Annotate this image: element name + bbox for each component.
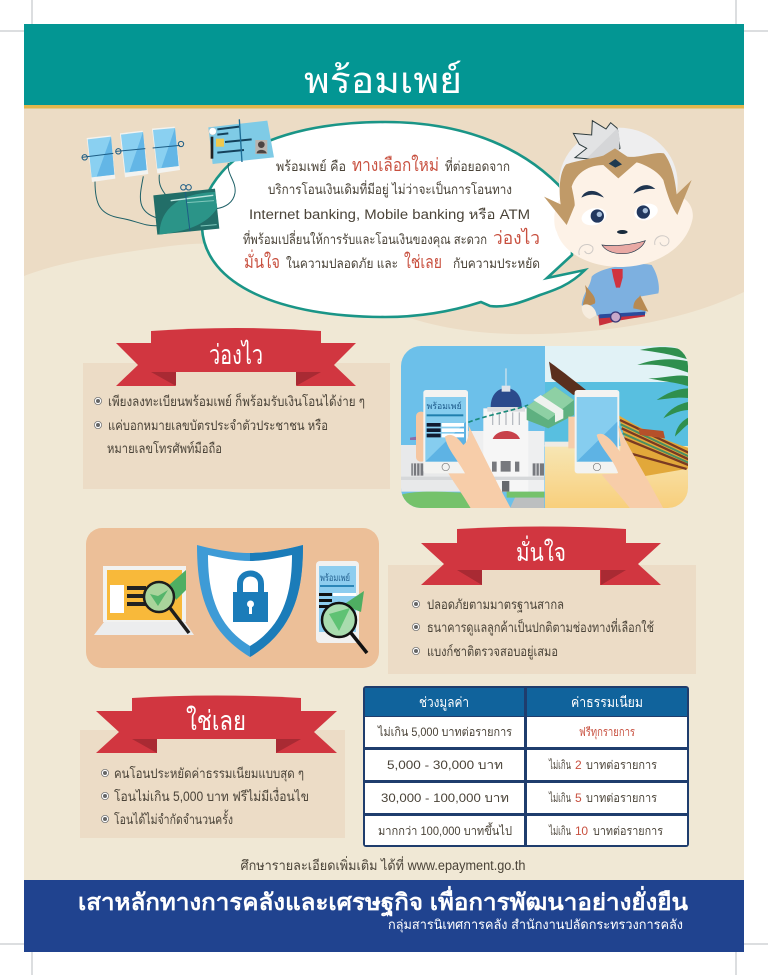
illustration: phone transfer between palace and beach: พร้อมเพย์	[427, 401, 462, 411]
body	[582, 264, 659, 318]
palace	[400, 368, 544, 492]
bullet list: โอนได้ไม่จำกัดจำนวนครั้ง	[114, 809, 233, 827]
phone 1	[82, 135, 115, 182]
ID card	[208, 119, 274, 164]
table rows: ไม่เกิน	[548, 791, 571, 805]
bubble text: มั่นใจ	[244, 249, 280, 272]
ribbon: มั่นใจ	[421, 526, 661, 585]
title: พร้อมเพย์	[304, 60, 462, 101]
table rows: 5	[575, 791, 582, 805]
ribbon: มั่นใจ: มั่นใจ	[516, 535, 566, 567]
table rows: บาทต่อรายการ	[593, 824, 663, 838]
right hand	[597, 425, 663, 508]
phone 3	[152, 127, 184, 173]
icon: laptop with magnifier	[94, 566, 194, 635]
fee table	[363, 686, 689, 847]
left hand	[445, 425, 512, 510]
bubble text: ทางเลือกใหม่	[352, 154, 439, 175]
ribbon: ว่องไว: ว่องไว	[209, 340, 263, 370]
panel: security illustration	[86, 528, 379, 668]
hair band	[544, 148, 692, 225]
bullet list	[101, 765, 309, 827]
mouth	[602, 241, 645, 254]
table rows: 30,000 - 100,000 บาท	[381, 791, 509, 805]
head back	[559, 128, 678, 239]
right phone	[575, 390, 619, 473]
bubble text: บริการโอนเงินเดิมที่มีอยู่ ไม่ว่าจะเป็นการโอนทาง	[268, 180, 512, 198]
bullet list: โอนไม่เกิน 5,000 บาท ฟรีไม่มีเงื่อนไข	[114, 787, 309, 804]
table header	[365, 688, 687, 716]
bubble text: ที่ต่อยอดจาก	[445, 157, 510, 174]
bubble text: กับความประหยัด	[453, 256, 540, 271]
bullet list: แค่บอกหมายเลขบัตรประจำตัวประชาชน หรือ	[108, 418, 328, 433]
table header: ค่าธรรมเนียม	[571, 694, 643, 710]
palm	[637, 347, 690, 437]
bullet list: ปลอดภัยตามมาตรฐานสากล	[427, 597, 564, 613]
table rows: 2	[575, 758, 582, 772]
icon: phone with magnifier: พร้อมเพย์	[320, 572, 350, 584]
icon: phone with magnifier	[316, 561, 367, 653]
footer slogan: เสาหลักทางการคลังและเศรษฐกิจ เพื่อการพัฒนาอย่างยั่งยืน	[78, 885, 688, 917]
mascot monkey	[544, 121, 693, 326]
table rows: 5,000 - 30,000 บาท	[387, 758, 503, 772]
left hand back fingers	[416, 412, 424, 462]
eyes	[580, 205, 608, 228]
footer band	[24, 880, 744, 952]
bubble text: Internet banking, Mobile banking หรือ ATM	[249, 207, 530, 222]
bubble text: ในความปลอดภัย และ	[286, 255, 398, 271]
bubble text: พร้อมเพย์ คือ	[276, 158, 346, 174]
speech bubble	[202, 122, 585, 317]
table rows: ฟรีทุกรายการ	[579, 725, 635, 740]
table header: ช่วงมูลค่า	[419, 694, 469, 711]
footer organisation: กลุ่มสารนิเทศการคลัง สำนักงานปลัดกระทรวงการคลัง	[388, 917, 683, 933]
icon: phones, ID card and bank book linked together	[82, 119, 274, 235]
page background panel	[24, 105, 744, 880]
bubble text: ว่องไว	[493, 227, 540, 248]
bullet list: แบงก์ชาติตรวจสอบอยู่เสมอ	[427, 643, 558, 660]
table rows: บาทต่อรายการ	[586, 758, 657, 772]
bubble text	[243, 154, 540, 272]
bullet list: ธนาคารดูแลลูกค้าเป็นปกติตามช่องทางที่เลือกใช้	[427, 618, 654, 636]
panel: ว่องไว	[83, 328, 390, 489]
brows	[581, 185, 655, 198]
table rows: ไม่เกิน	[548, 758, 571, 772]
boat hull	[618, 415, 690, 477]
website note: ศึกษารายละเอียดเพิ่มเติม ได้ที่ www.epayment.go.th	[240, 856, 526, 873]
ribbon: ว่องไว	[116, 328, 356, 386]
table rows: 10	[575, 824, 588, 838]
table rows: มากกว่า 100,000 บาทขึ้นไป	[378, 822, 512, 838]
panel: ใช่เลย	[80, 696, 345, 838]
panel: มั่นใจ	[388, 526, 696, 674]
table rows	[365, 717, 687, 845]
dashed transfer line	[468, 405, 528, 422]
lawn	[402, 492, 470, 508]
left phone	[423, 390, 468, 473]
illustration: phone transfer between palace and beach	[400, 346, 690, 510]
ribbon: ใช่เลย	[96, 696, 337, 753]
bubble text: ใช่เลย	[404, 251, 442, 272]
table rows: ไม่เกิน	[548, 824, 571, 838]
forehead gem	[609, 159, 622, 168]
table rows: บาทต่อรายการ	[586, 791, 657, 805]
boat prow	[549, 362, 586, 395]
bullet list: หมายเลขโทรศัพท์มือถือ	[107, 440, 222, 456]
title band	[24, 24, 744, 108]
face	[554, 161, 693, 267]
bullet list	[94, 392, 365, 456]
bullet list: คนโอนประหยัดค่าธรรมเนียมแบบสุด ๆ	[114, 765, 304, 782]
icon: shield with padlock	[197, 545, 303, 657]
phone 2	[116, 131, 148, 177]
money stack	[527, 387, 574, 428]
table rows: ไม่เกิน 5,000 บาทต่อรายการ	[377, 725, 512, 739]
crown	[573, 121, 620, 160]
bullet list	[412, 597, 654, 660]
bullet list: เพียงลงทะเบียนพร้อมเพย์ ก็พร้อมรับเงินโอนได้ง่าย ๆ	[108, 392, 365, 409]
bank book	[153, 185, 219, 235]
right hand back fingers	[568, 416, 575, 448]
bubble text: ที่พร้อมเปลี่ยนให้การรับและโอนเงินของคุณ สะดวก	[243, 230, 487, 248]
white sea strip	[544, 442, 568, 447]
nose	[617, 230, 628, 234]
ribbon: ใช่เลย: ใช่เลย	[186, 705, 246, 736]
cheek swirls	[579, 244, 593, 255]
